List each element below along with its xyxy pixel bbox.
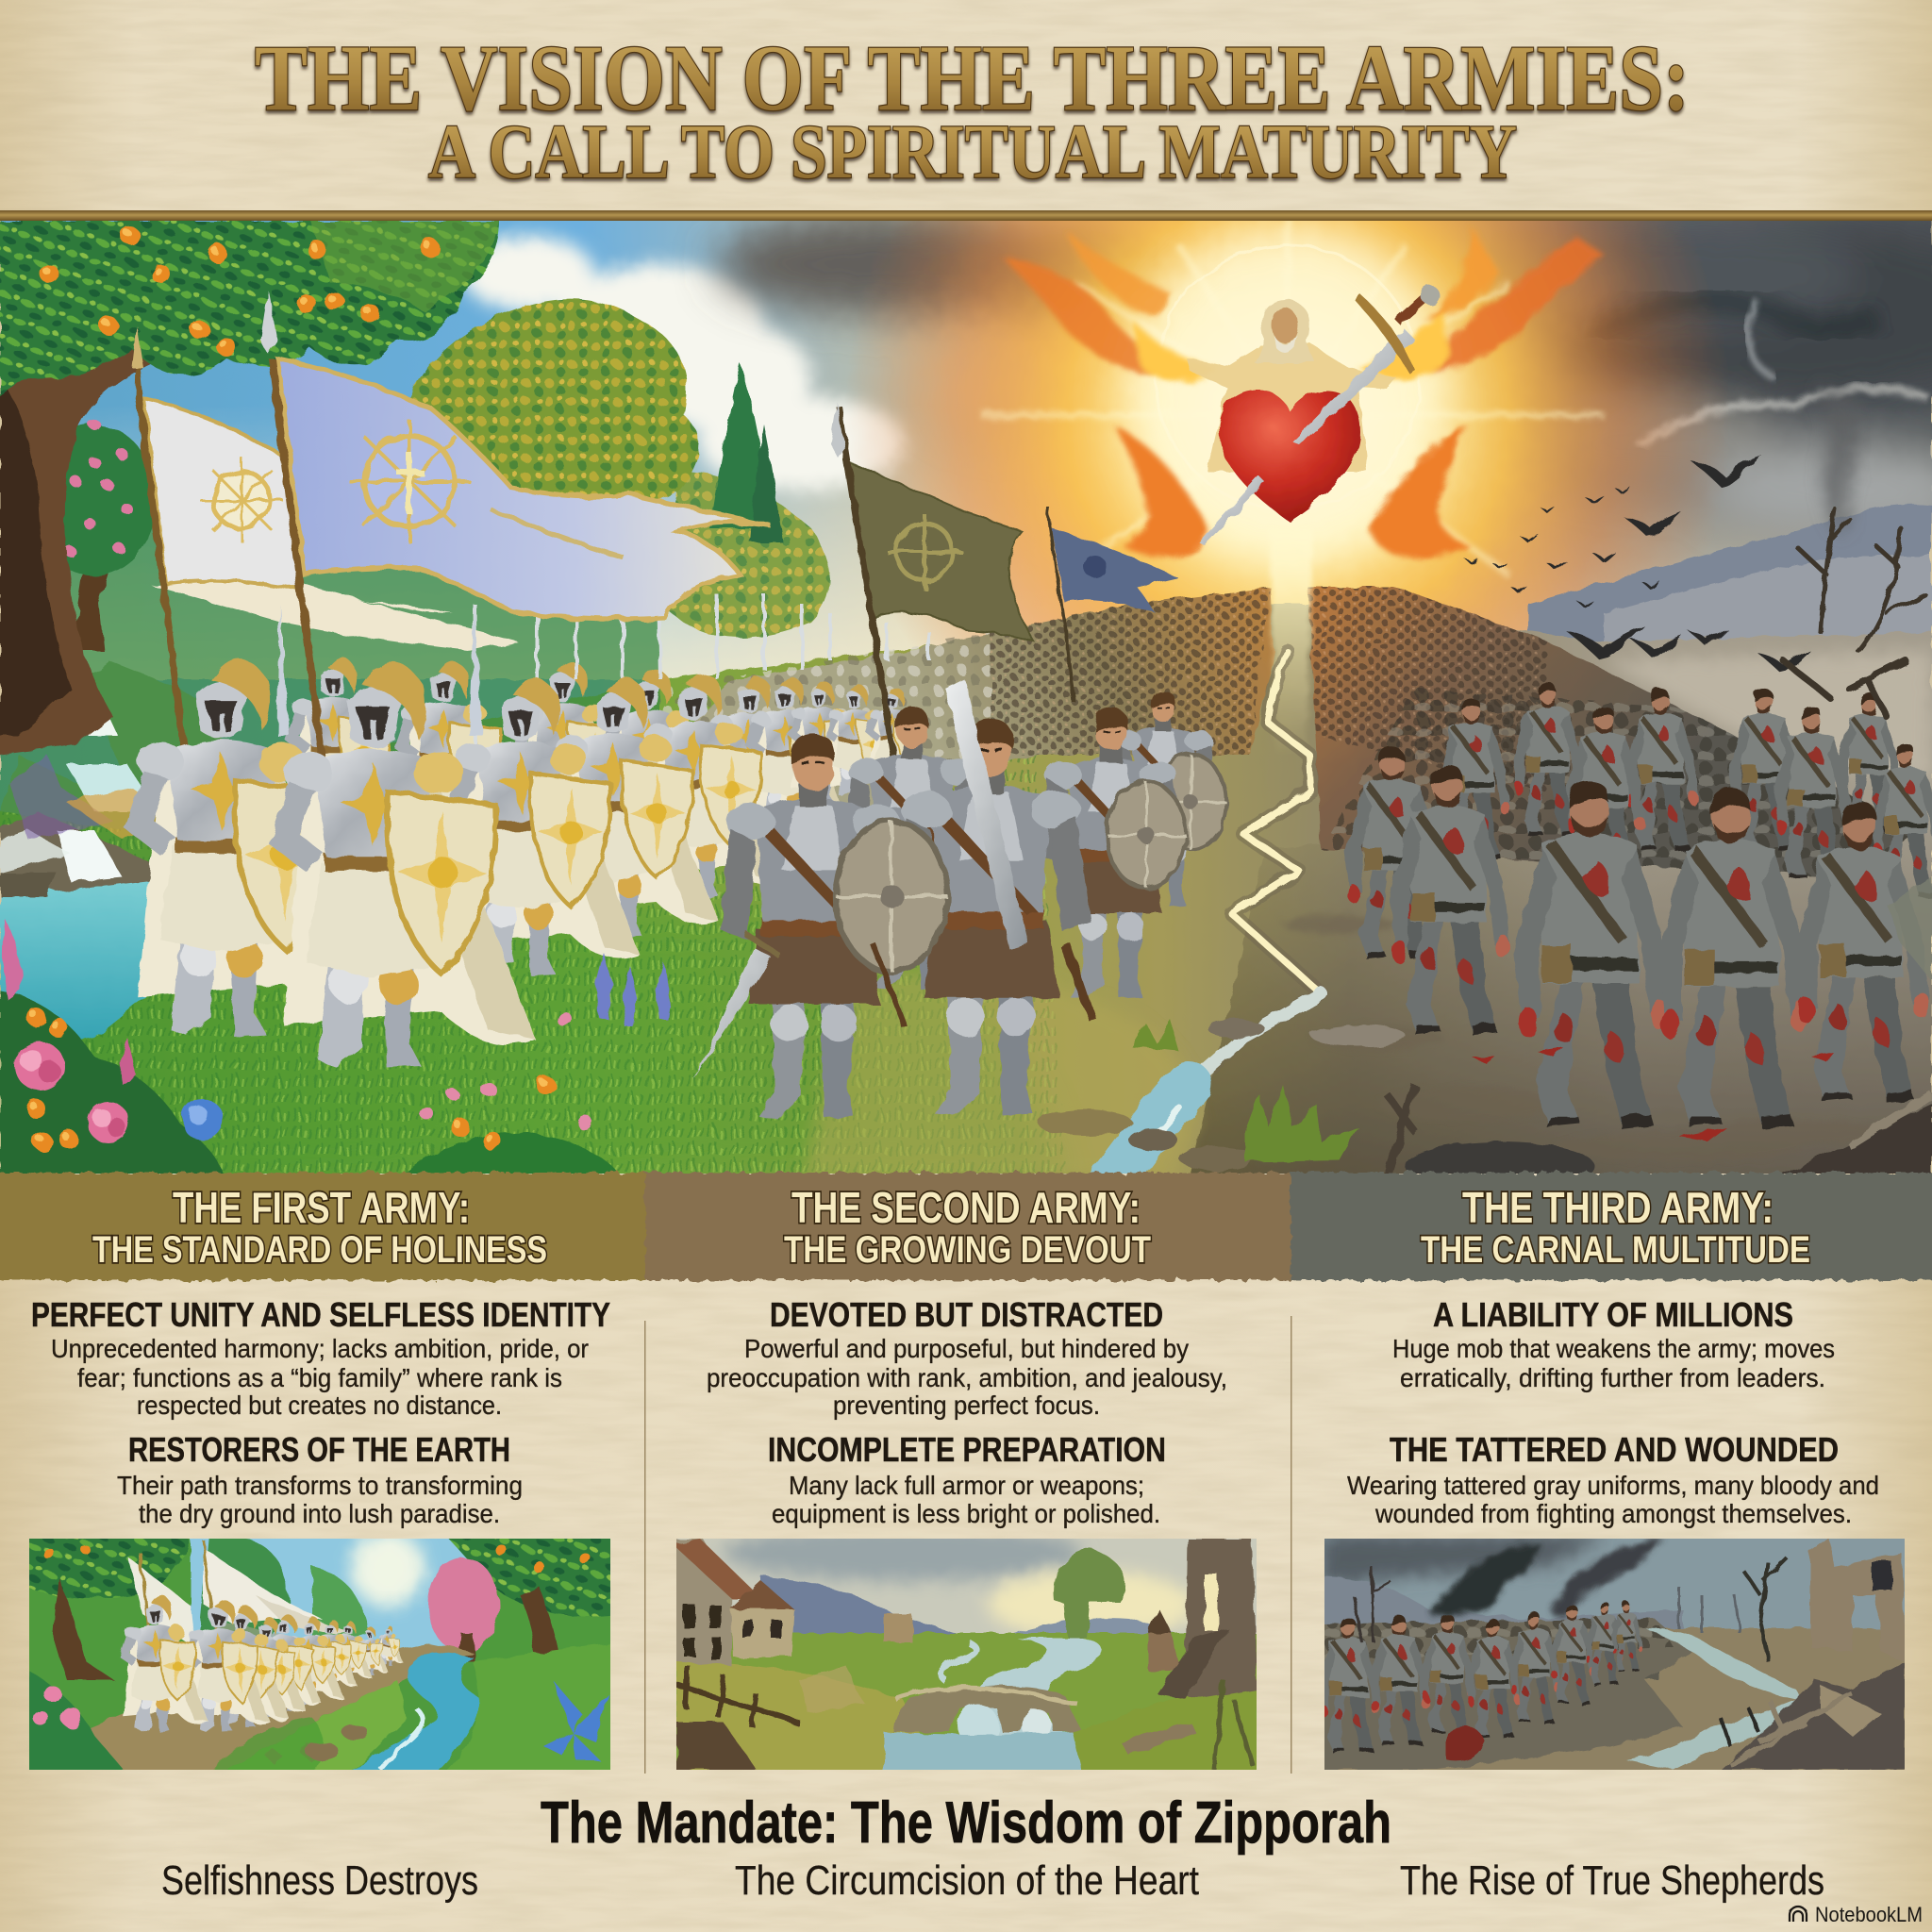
spear blades [277,604,483,736]
column text: third army: erratically, drifting further from leaders. [1400,1363,1825,1392]
winding stream [1113,651,1321,1179]
mandate points [161,1857,1824,1904]
stream rocks and grass [1038,1019,1406,1171]
column text: first army: the dry ground into lush paradise. [139,1499,500,1528]
column text: second army: INCOMPLETE PREPARATION [768,1430,1166,1469]
big fruit tree [0,221,500,755]
column text: first army: Unprecedented harmony; lacks ambition, pride, or [51,1334,589,1363]
title: THE VISION OF THE THREE ARMIES: [255,25,1690,130]
title: A CALL TO SPIRITUAL MATURITY [428,108,1517,194]
column text: second army: equipment is less bright or polished. [772,1499,1160,1528]
blue banner [260,291,771,1008]
mandate heading: The Mandate: The Wisdom of Zipporah [541,1790,1391,1856]
column text: second army: Many lack full armor or weapons; [789,1471,1144,1500]
NotebookLM watermark: NotebookLM [1815,1903,1923,1926]
flames [1000,226,1604,558]
column text: third army: THE TATTERED AND WOUNDED [1390,1430,1839,1469]
header strip: first army: THE STANDARD OF HOLINESS [92,1229,547,1271]
blossom tree [32,419,157,651]
column text: second army: preventing perfect focus. [833,1391,1100,1420]
thumbnail: third army wasteland [1324,1539,1905,1770]
gold divider band [0,210,1932,221]
mandate points: The Circumcision of the Heart [735,1857,1199,1904]
river and waterfalls [0,660,226,1057]
column text: third army: wounded from fighting amongst themselves. [1374,1499,1852,1528]
smoke plume [1816,387,1857,533]
dead trees [1783,509,1924,717]
back rank of the first army [285,658,931,858]
column text: second army: DEVOTED BUT DISTRACTED [770,1295,1163,1334]
column text: first army: respected but creates no distance. [137,1391,502,1420]
column text: first army: fear; functions as a “big family” where rank is [77,1363,562,1392]
header strip: first army [0,1173,645,1280]
third army soldiers [1346,682,1932,1128]
mandate points: Selfishness Destroys [161,1857,478,1904]
header strip: second army: THE SECOND ARMY: [791,1183,1141,1232]
column text: second army: preoccupation with rank, ambition, and jealousy, [707,1363,1227,1392]
column text: second army: Powerful and purposeful, but hindered by [744,1334,1189,1363]
thumbnail: second army countryside [676,1539,1257,1770]
left crowd of marching soldiers [660,587,1274,811]
white banner [132,325,518,958]
mountains [1527,504,1932,641]
thumbnail: first army in paradise [29,1539,610,1770]
foreground flowers left [0,920,671,1179]
mandate points: The Rise of True Shepherds [1400,1857,1824,1904]
column text: first army: Their path transforms to transforming [117,1471,523,1500]
column text: second army [707,1295,1227,1528]
storm clouds [717,212,1932,533]
clouds: left white [462,236,906,491]
sword through heart [1199,286,1440,545]
cloud highlights [1604,301,1924,443]
spears [277,566,929,811]
column text: third army: A LIABILITY OF MILLIONS [1433,1295,1793,1334]
header strip: third army: THE THIRD ARMY: [1462,1183,1774,1232]
right crowd of marching soldiers [1307,587,1920,877]
second army soldiers [693,679,1226,1120]
second army banners [830,402,1178,841]
column text: third army [1347,1295,1879,1528]
column text: third army: Wearing tattered gray uniforms, many bloody and [1347,1471,1879,1500]
light beam [1269,528,1313,755]
sun glow and rays [853,221,1717,645]
column text: first army: RESTORERS OF THE EARTH [128,1430,510,1469]
column text: third army: Huge mob that weakens the army; moves [1392,1334,1835,1363]
heavenly figure [1187,300,1396,472]
ground [0,604,1932,1179]
header strip: first army: THE FIRST ARMY: [173,1183,470,1232]
right foreground debris [1387,877,1932,1191]
hero illustration: three armies [0,212,1932,1191]
first army knights [125,659,783,1068]
header strip: second army: THE GROWING DEVOUT [784,1229,1151,1271]
sky [0,212,1932,816]
birds [1465,456,1810,673]
header strip: third army [1291,1173,1932,1280]
column text: first army [31,1295,610,1528]
header strip: second army [645,1173,1291,1280]
heart [1219,390,1360,522]
column text: first army: PERFECT UNITY AND SELFLESS IDENTITY [31,1295,610,1334]
distant green trees [0,299,830,811]
title [255,25,1690,194]
header strip: third army: THE CARNAL MULTITUDE [1421,1229,1810,1271]
